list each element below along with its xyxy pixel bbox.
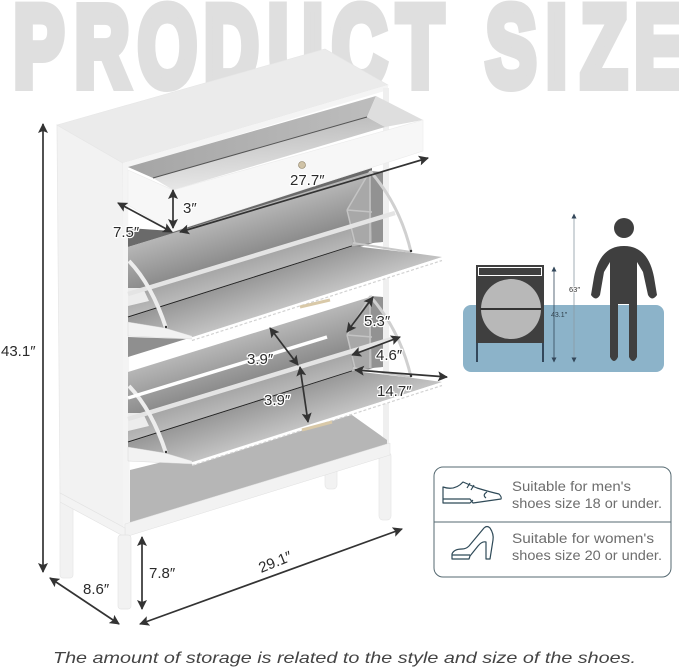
men's shoe text: Suitable for men's [512, 479, 631, 494]
dimension: tier 3.9 upper: 3.9″ [247, 351, 274, 368]
women's shoe text: Suitable for women's [512, 531, 654, 546]
dimension: tier 3.9 upper [247, 328, 298, 368]
dimension: width 29.1: 29.1″ [256, 548, 295, 577]
lower gap wedge [128, 337, 186, 357]
dimension: drawer width 27.7 [180, 158, 428, 232]
dimension: tier 3.9 lower [264, 367, 308, 422]
dimension: flap 14.7: 14.7″ [377, 383, 412, 400]
blue floor panel [463, 305, 664, 372]
dimension: tier 3.9 lower: 3.9″ [264, 392, 291, 409]
dimension: drawer depth 7.5: 7.5″ [113, 224, 140, 241]
dimension: depth 8.6: 8.6″ [83, 581, 110, 598]
cabinet illustration [57, 49, 442, 609]
arrow 43.1 [551, 267, 568, 362]
dimension: flap 14.7 [355, 370, 447, 400]
bottom shelf [130, 415, 387, 523]
drawer interior [128, 96, 423, 190]
dimension: leg height 7.8 [142, 537, 176, 609]
dimension: drawer width 27.7: 27.7″ [290, 172, 325, 189]
dimension: compartment 5.3: 5.3″ [364, 313, 391, 330]
drawer front [128, 120, 423, 232]
dimension: drawer depth 7.5 [113, 203, 172, 241]
men's shoe text: shoes size 18 or under. [512, 496, 662, 511]
front leg [118, 535, 131, 609]
strip under drawer [128, 168, 372, 247]
upper handle [300, 300, 330, 307]
dimension: leg height 7.8: 7.8″ [149, 565, 176, 582]
dimension: drawer depth 3 [173, 190, 197, 228]
dimension: compartment 4.6 [352, 337, 403, 364]
dimension: drawer depth 3: 3″ [183, 200, 197, 217]
arrow 43.1: 43.1″ [551, 312, 568, 319]
men's shoe text [512, 479, 662, 511]
dimension: compartment 4.6: 4.6″ [376, 347, 403, 364]
person icon [591, 218, 657, 361]
icon: women's heel [452, 526, 493, 559]
mini cabinet [476, 265, 544, 362]
cabinet front opening [123, 85, 390, 530]
women's shoe text: shoes size 20 or under. [512, 548, 662, 563]
back legs [60, 452, 391, 578]
height comparison diagram [463, 214, 664, 372]
upper shoe compartment [128, 171, 442, 340]
arrow 63: 63″ [569, 285, 580, 294]
lower white stripe [128, 337, 327, 398]
cabinet side panel [57, 125, 125, 528]
cabinet top [57, 49, 388, 163]
dimension: width 29.1 [140, 529, 402, 624]
footnote caption: The amount of storage is related to the style and size of the shoes. [53, 650, 636, 667]
dimension: depth 8.6 [50, 578, 119, 624]
dimension: compartment 5.3 [347, 297, 391, 332]
panel outline [434, 467, 671, 577]
women's shoe text [512, 531, 662, 563]
dimension: height 43.1: 43.1″ [1, 343, 36, 360]
drawer knob [298, 162, 306, 168]
shoe size panel [434, 467, 671, 577]
lower handle [302, 422, 332, 430]
icon: men's shoe [443, 482, 501, 503]
lower shoe compartment [128, 296, 442, 466]
